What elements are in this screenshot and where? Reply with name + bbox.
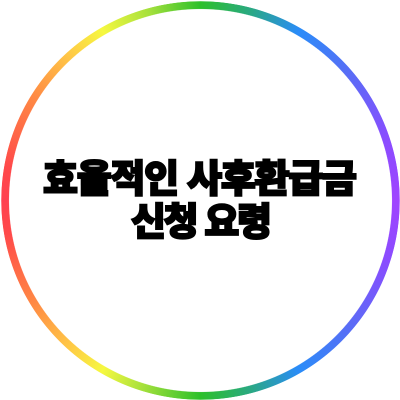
title line 2: 신청 요령 [131,202,272,244]
title line 1: 효율적인 사후환급금 [43,159,357,201]
